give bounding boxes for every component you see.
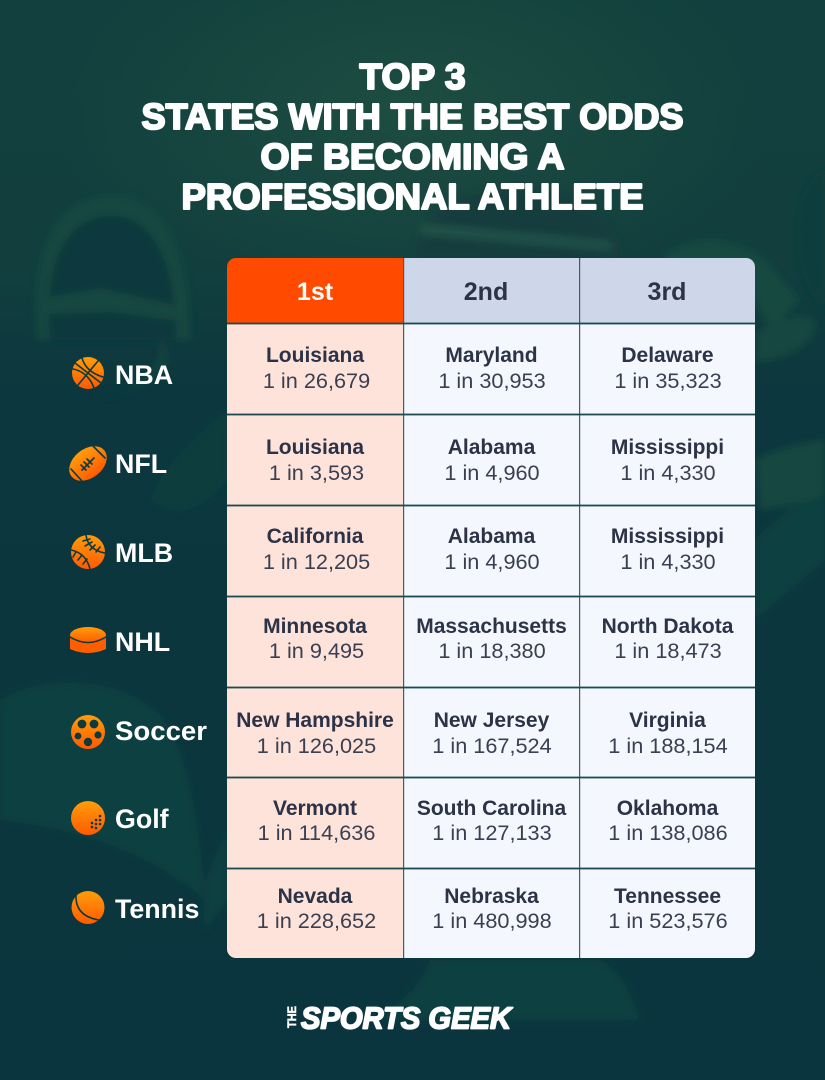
row: Golf: South Carolina: [417, 797, 566, 820]
row: Soccer: Virginia: [629, 709, 706, 732]
row: Soccer: New Hampshire: [236, 709, 394, 732]
sport label: Soccer: Soccer: [115, 716, 208, 746]
column headers: [297, 278, 686, 306]
row: NFL: Alabama: [448, 436, 536, 459]
row: Tennis: 1 in 480,998: [432, 908, 552, 933]
row: Tennis: [257, 885, 728, 933]
sport label: Tennis: Tennis: [115, 894, 199, 924]
row: NHL: Massachusetts: [416, 615, 567, 638]
row: MLB: 1 in 4,330: [620, 549, 716, 574]
row: NHL: [263, 615, 734, 663]
row: Soccer: 1 in 126,025: [257, 733, 376, 758]
row: Golf: 1 in 114,636: [258, 820, 375, 845]
row: NBA: [263, 344, 722, 393]
logo: The Sports Geek: THE: [285, 1006, 299, 1028]
logo: The Sports Geek: SPORTS GEEK: [301, 1002, 513, 1036]
sport label: NHL: [70, 627, 170, 657]
row: Golf: Oklahoma: [617, 797, 719, 820]
row: Golf: [258, 797, 728, 845]
row: Golf: 1 in 127,133: [432, 820, 552, 845]
title: [142, 56, 684, 217]
row: Tennis: 1 in 523,576: [608, 908, 728, 933]
row: NFL: 1 in 3,593: [269, 460, 364, 485]
sport label: Golf: [71, 801, 169, 835]
row: NFL: 1 in 4,960: [444, 460, 540, 485]
table: [227, 258, 755, 958]
row: NHL: North Dakota: [602, 615, 734, 638]
row: Soccer: [236, 709, 728, 758]
icon: hockey puck: [70, 627, 106, 653]
row: Tennis: Tennessee: [614, 885, 721, 908]
sport label: Golf: Golf: [115, 804, 169, 834]
title: STATES WITH THE BEST ODDS: [142, 96, 684, 137]
sport label: Tennis: [72, 891, 199, 924]
sport label: MLB: MLB: [115, 538, 173, 568]
sport label: NBA: [72, 357, 173, 390]
table cell backgrounds: [227, 258, 755, 958]
row: MLB: 1 in 12,205: [263, 549, 370, 574]
icon: football: [63, 439, 113, 488]
row: NBA: Maryland: [445, 344, 538, 367]
row: NFL: 1 in 4,330: [620, 460, 716, 485]
row: NHL: 1 in 18,473: [614, 638, 722, 663]
row: Tennis: 1 in 228,652: [257, 908, 376, 933]
row: NBA: Delaware: [621, 344, 714, 367]
title: OF BECOMING A: [260, 136, 564, 177]
row: Soccer: 1 in 167,524: [432, 733, 552, 758]
row: NHL: 1 in 9,495: [269, 638, 364, 663]
row: MLB: Alabama: [448, 525, 536, 548]
title: PROFESSIONAL ATHLETE: [182, 176, 644, 217]
column headers: 3rd: [648, 278, 686, 306]
row: NFL: Louisiana: [266, 436, 364, 459]
sport label: MLB: [71, 535, 173, 569]
row: Golf: Vermont: [273, 797, 357, 820]
row: NBA: 1 in 35,323: [614, 368, 722, 393]
row: NBA: 1 in 30,953: [438, 368, 546, 393]
row: NBA: Louisiana: [266, 344, 364, 367]
sport label: NHL: NHL: [115, 627, 170, 657]
sport label: NFL: NFL: [115, 449, 167, 479]
sport label: NBA: NBA: [115, 360, 173, 390]
icon: basketball: [72, 357, 104, 389]
row: MLB: California: [267, 525, 364, 548]
row: Tennis: Nebraska: [444, 885, 539, 908]
icon: tennis ball: [72, 891, 104, 924]
row: NFL: Mississippi: [611, 436, 724, 459]
row: MLB: [263, 525, 724, 574]
row: Soccer: 1 in 188,154: [608, 733, 728, 758]
sport label: NFL: [63, 439, 167, 488]
sport label: Soccer: [71, 715, 208, 749]
row: NFL: [266, 436, 724, 485]
row: Tennis: Nevada: [278, 885, 353, 908]
row: MLB: Mississippi: [611, 525, 724, 548]
column headers: 2nd: [464, 278, 508, 306]
icon: soccer ball: [71, 715, 105, 749]
icon: baseball: [71, 535, 105, 569]
row: NBA: 1 in 26,679: [263, 368, 370, 393]
row: MLB: 1 in 4,960: [444, 549, 540, 574]
row: Golf: 1 in 138,086: [608, 820, 728, 845]
row: Soccer: New Jersey: [434, 709, 550, 732]
title: TOP 3: [360, 56, 466, 97]
icon: golf ball: [71, 801, 105, 835]
row: NHL: 1 in 18,380: [438, 638, 546, 663]
row: NHL: Minnesota: [263, 615, 367, 638]
column headers: 1st: [297, 278, 334, 306]
